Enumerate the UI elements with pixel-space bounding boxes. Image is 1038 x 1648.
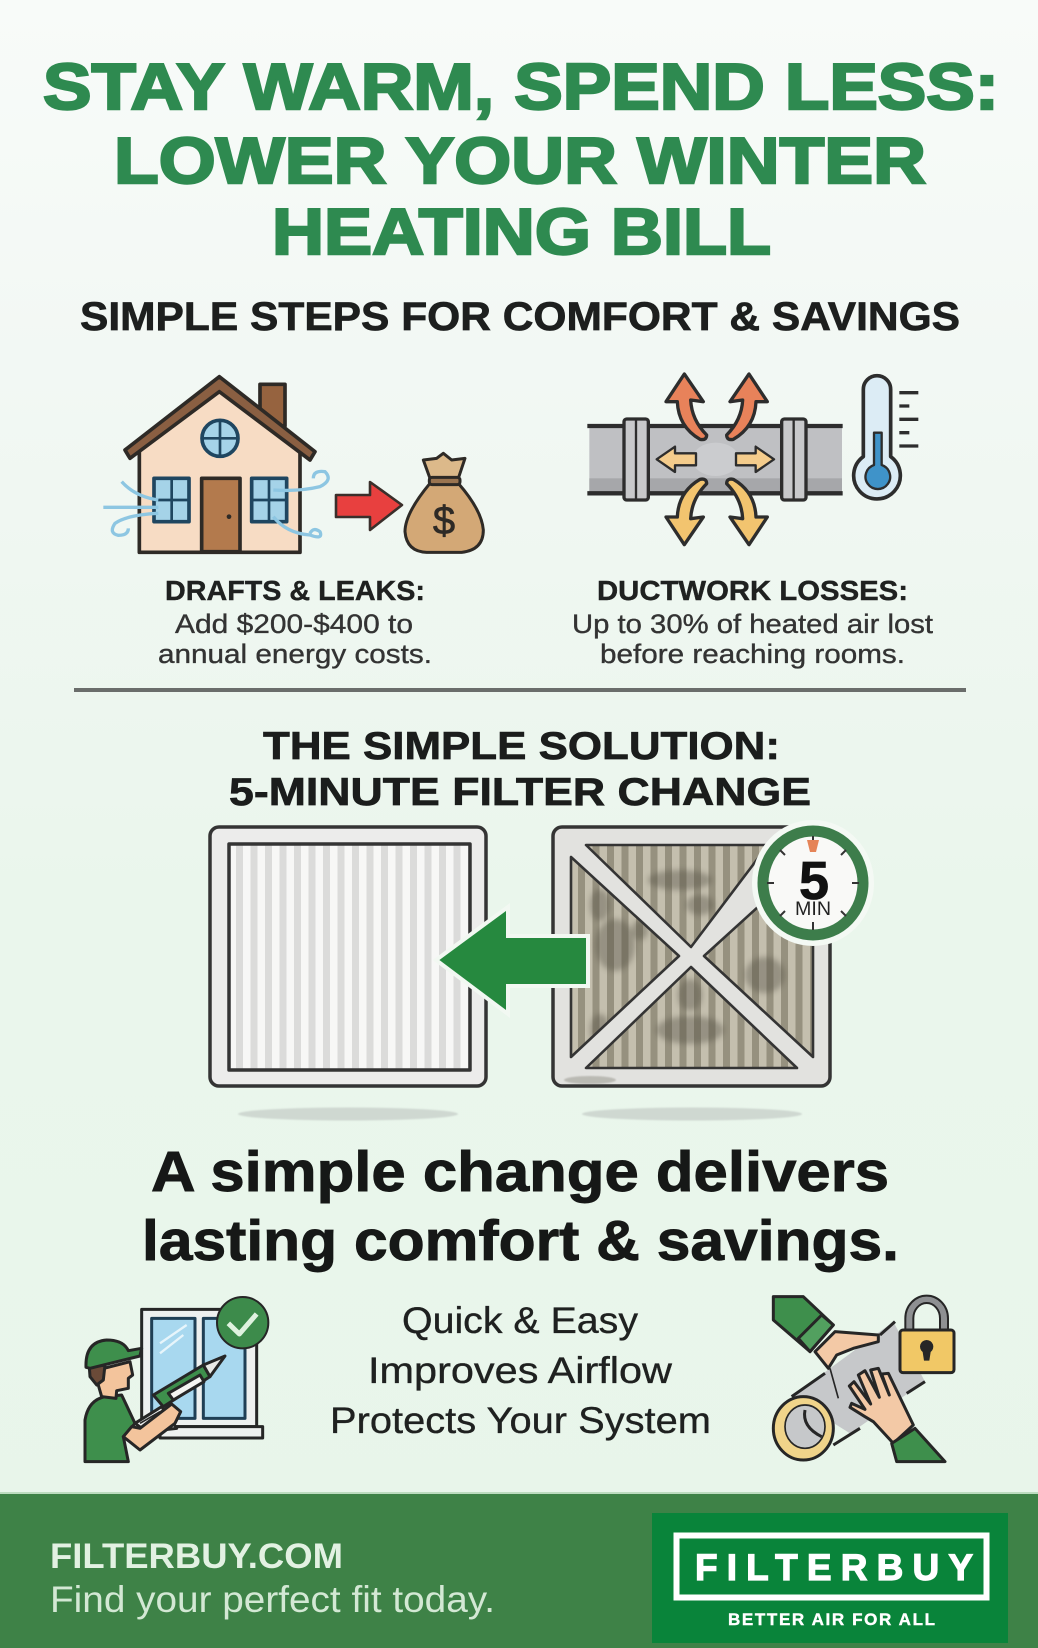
statement: lasting comfort & savings. [142, 1209, 899, 1273]
icon: worker caulking window [85, 1297, 268, 1462]
icon: sealing duct with tape and lock [773, 1296, 954, 1462]
icon: 5 minute timer: MIN [795, 899, 831, 920]
shadow: clean filter [238, 1108, 458, 1120]
text block: drafts and leaks [158, 575, 432, 669]
statement: A simple change delivers [151, 1140, 889, 1204]
filter media with dust [572, 846, 812, 1067]
icon: 5 minute timer: 5 [799, 851, 829, 911]
heading: the simple solution: 5-MINUTE FILTER CHANGE [229, 771, 811, 814]
icon: house with drafts [103, 377, 328, 552]
icon: 5 minute timer [752, 820, 874, 946]
title: STAY WARM, SPEND LESS: [43, 50, 999, 123]
text block: ductwork losses: Up to 30% of heated air lost [572, 609, 934, 639]
clean filter [210, 827, 486, 1086]
benefits list [330, 1300, 711, 1441]
icon: thermometer [854, 376, 918, 499]
icon: money bag [405, 453, 483, 552]
icon: money bag: $ [433, 499, 455, 543]
logo: Filterbuy [652, 1513, 1008, 1643]
shadow: dirty filter [582, 1108, 802, 1120]
arrow: swap filter [436, 907, 588, 1014]
text block: ductwork losses [572, 575, 934, 669]
title [43, 50, 999, 268]
title: HEATING BILL [272, 195, 771, 268]
footer text: tagline: Find your perfect fit today. [50, 1579, 495, 1620]
logo: Filterbuy: FILTERBUY [695, 1547, 973, 1588]
benefits list: Protects Your System [330, 1400, 711, 1441]
heading: the simple solution: THE SIMPLE SOLUTION: [263, 725, 780, 768]
text block: ductwork losses: DUCTWORK LOSSES: [597, 575, 908, 606]
arrow: drafts to cost [336, 482, 402, 530]
title: LOWER YOUR WINTER [114, 124, 926, 197]
dirty filter [553, 827, 830, 1086]
statement [142, 1140, 899, 1273]
text block: drafts and leaks: DRAFTS & LEAKS: [165, 575, 425, 606]
footer band [0, 1492, 1038, 1648]
benefits list: Improves Airflow [368, 1350, 672, 1391]
text block: drafts and leaks: annual energy costs. [158, 639, 432, 669]
text block: drafts and leaks: Add $200-$400 to [175, 609, 413, 639]
heading: the simple solution [229, 725, 811, 814]
footer text: website: FILTERBUY.COM [50, 1537, 343, 1576]
benefits list: Quick & Easy [402, 1300, 639, 1341]
icon: leaking duct [587, 374, 843, 545]
text block: ductwork losses: before reaching rooms. [600, 639, 905, 669]
logo: Filterbuy: BETTER AIR FOR ALL [728, 1610, 935, 1629]
subheading: SIMPLE STEPS FOR COMFORT & SAVINGS [80, 295, 960, 339]
